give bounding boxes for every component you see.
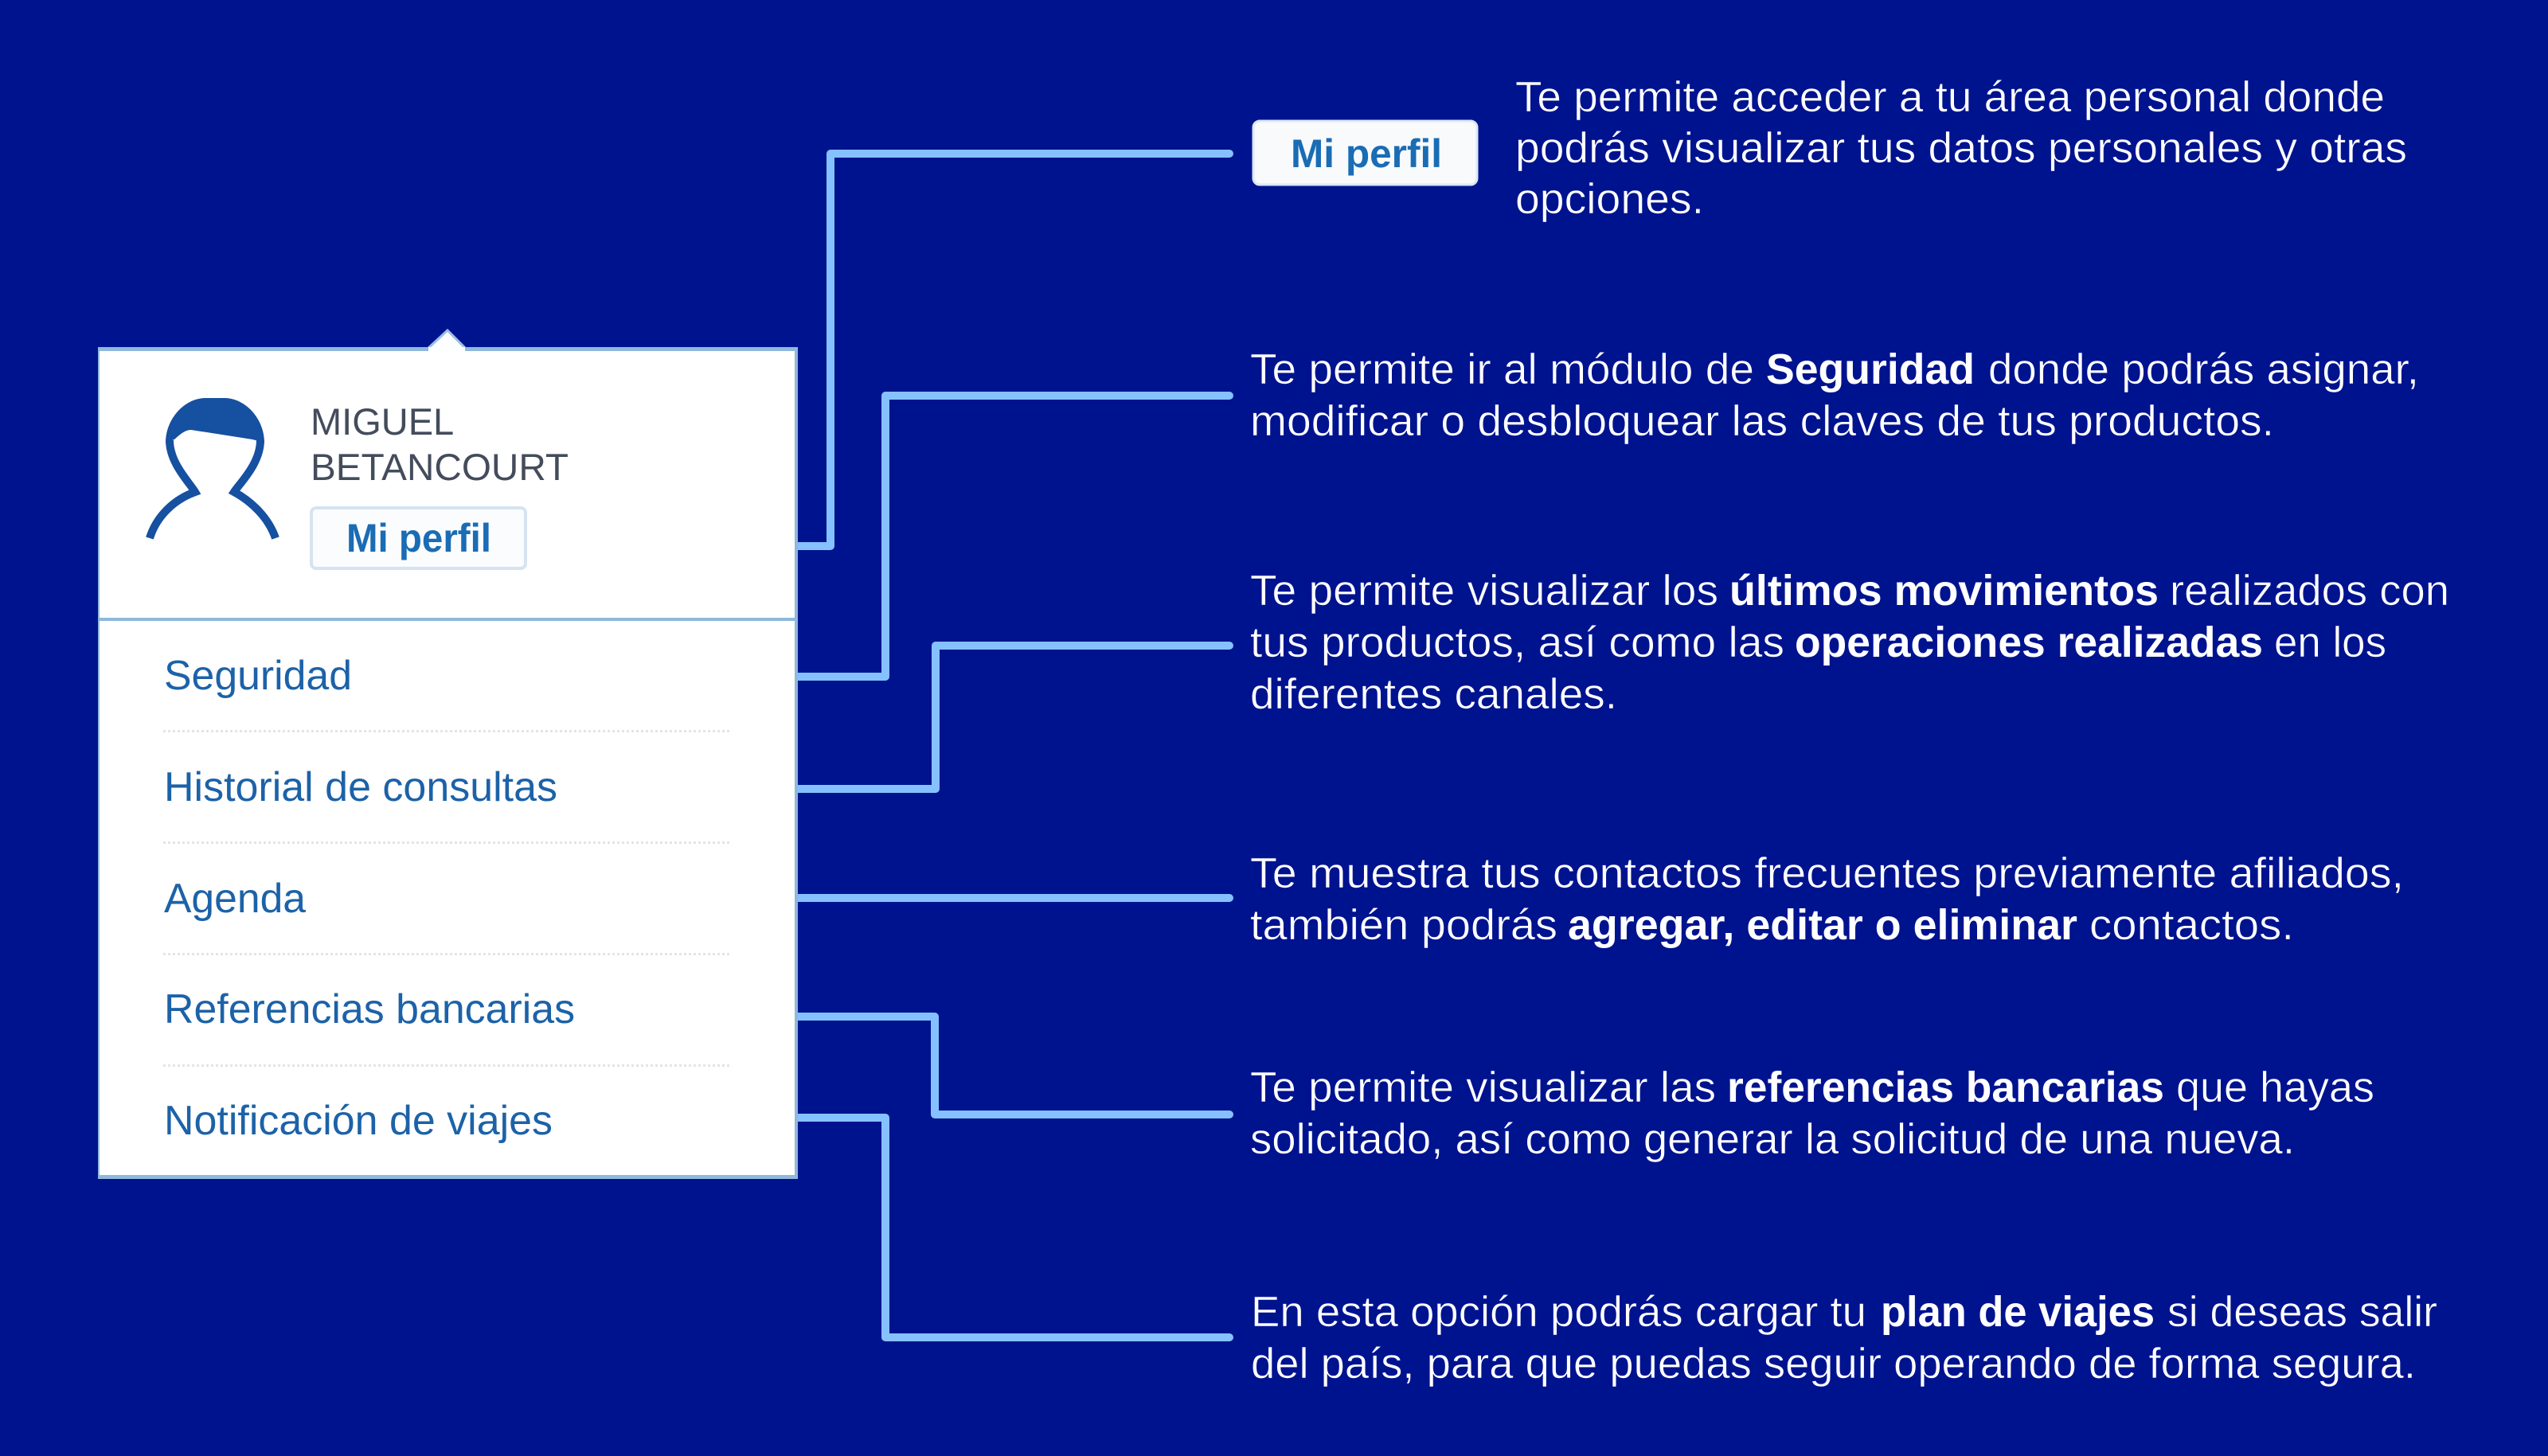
menu list: Agenda [164, 876, 306, 922]
text: Notificación description: En esta opción podrás cargar tu [1251, 1288, 1866, 1336]
text: Notificación description: si deseas salir [2167, 1288, 2437, 1336]
panel pointer [427, 330, 467, 349]
button: Mi perfil callout: Mi perfil [1291, 131, 1442, 176]
text: Notificación description: del país, para que puedas seguir operando de forma segura. [1251, 1340, 2416, 1388]
icon: user avatar [150, 398, 276, 538]
user name: MIGUEL [311, 400, 454, 443]
panel card [98, 347, 798, 1179]
text: Historial description: Te permite visualizar los [1250, 567, 1718, 615]
text: Referencias description: referencias bancarias [1727, 1064, 2164, 1111]
text: Agenda description: Te muestra tus contactos frecuentes previamente afiliados, [1250, 849, 2404, 897]
text: Mi perfil description [1515, 73, 2407, 223]
button: Mi perfil callout [1253, 121, 1477, 185]
text: Seguridad description: Seguridad [1766, 345, 1975, 393]
text: Agenda description: contactos. [2089, 901, 2294, 949]
text: Seguridad description: donde podrás asignar, [1988, 345, 2419, 393]
text: Historial description: tus productos, así como las [1250, 619, 1784, 666]
text: Seguridad description [1250, 345, 2419, 445]
text: Mi perfil description: opciones. [1515, 175, 1704, 223]
text: Historial description: realizados con [2170, 567, 2449, 615]
menu list: Referencias bancarias [164, 986, 575, 1032]
text: Agenda description: también podrás [1250, 901, 1557, 949]
button: Mi perfil [311, 508, 526, 568]
user name [311, 400, 569, 488]
text: Historial description: diferentes canales. [1250, 670, 1617, 718]
text: Historial description [1250, 567, 2449, 718]
text: Mi perfil description: podrás visualizar tus datos personales y otras [1515, 124, 2407, 172]
menu list [163, 653, 730, 1144]
connector: Mi perfil [796, 154, 1229, 546]
text: Agenda description [1250, 849, 2404, 949]
text: Historial description: operaciones realizadas [1795, 619, 2263, 666]
text: Referencias description [1250, 1064, 2374, 1163]
text: Historial description: en los [2274, 619, 2386, 666]
button: Mi perfil: Mi perfil [346, 516, 491, 560]
menu list: Historial de consultas [164, 764, 557, 810]
connector: Notificación de viajes [796, 1118, 1229, 1337]
text: Seguridad description: Te permite ir al módulo de [1250, 345, 1754, 393]
connector: Historial de consultas [796, 646, 1229, 789]
text: Referencias description: que hayas [2176, 1064, 2374, 1111]
header divider [100, 618, 795, 621]
user name: BETANCOURT [311, 446, 569, 488]
text: Historial description: últimos movimientos [1729, 567, 2159, 615]
panel: user menu [98, 330, 798, 1179]
text: Referencias description: Te permite visualizar las [1250, 1064, 1716, 1111]
text: Seguridad description: modificar o desbloquear las claves de tus productos. [1250, 397, 2274, 445]
connector: Referencias bancarias [796, 1017, 1229, 1114]
connector: Seguridad [796, 396, 1229, 677]
connector: Agenda [796, 894, 1229, 902]
text: Mi perfil description: Te permite acceder a tu área personal donde [1515, 73, 2385, 121]
menu list: Seguridad [164, 653, 352, 699]
text: Notificación description [1251, 1288, 2437, 1388]
text: Notificación description: plan de viajes [1881, 1288, 2155, 1336]
text: Referencias description: solicitado, así como generar la solicitud de una nueva. [1250, 1115, 2295, 1163]
menu list: Notificación de viajes [164, 1098, 553, 1144]
text: Agenda description: agregar, editar o eliminar [1568, 901, 2077, 949]
